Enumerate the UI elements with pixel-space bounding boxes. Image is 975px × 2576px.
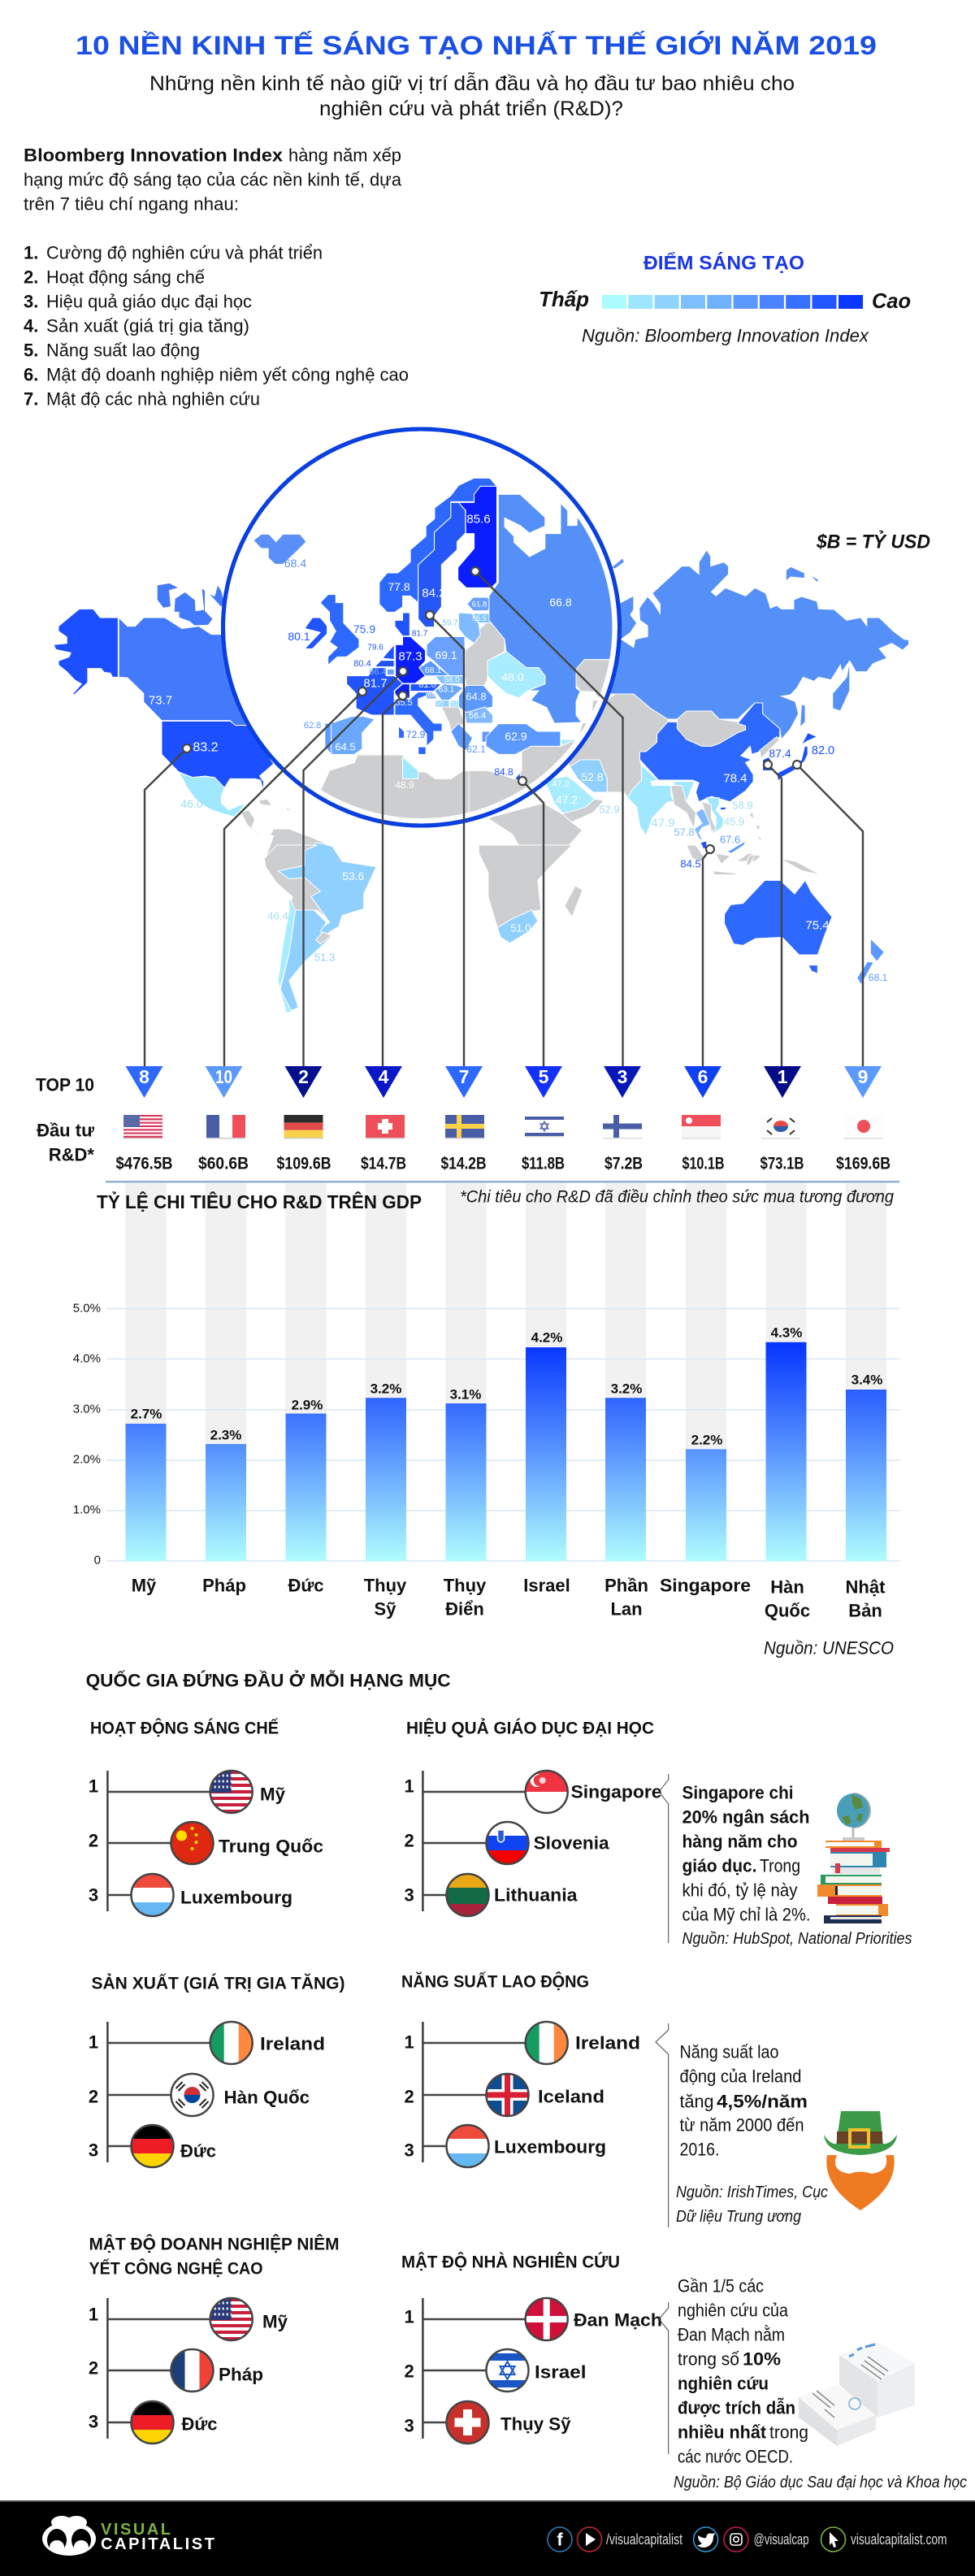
R&D investment values: $14.7B [361, 1154, 406, 1173]
criteria list: 5. [24, 340, 38, 361]
callout: Ireland: từ năm 2000 đến [679, 2114, 804, 2136]
panel: manufacturing: Ireland [260, 2033, 325, 2054]
map value labels: 67.6 [720, 834, 740, 845]
map value labels: 47.2 [556, 793, 578, 806]
R&D investment values: $7.2B [604, 1154, 643, 1173]
chart title: TỶ LỆ CHI TIÊU CHO R&D TRÊN GDP [97, 1190, 422, 1212]
panel: manufacturing [89, 1975, 344, 2168]
panel: manufacturing: 3 [89, 2140, 98, 2160]
map value labels: 55.5 [472, 614, 487, 622]
panel: patent activity [89, 1718, 323, 1917]
callout: Ireland: động của Ireland [679, 2066, 801, 2087]
panel: manufacturing: 1 [89, 2032, 98, 2053]
panel: labor productivity: Luxembourg [494, 2137, 606, 2157]
intro text block: Bloomberg Innovation Index [24, 145, 284, 166]
y axis labels: 4.0% [73, 1352, 101, 1365]
y axis labels: 1.0% [73, 1503, 101, 1516]
bar value labels: 4.3% [771, 1325, 802, 1341]
rank triangles: 6 [698, 1066, 708, 1087]
bar value labels: 2.2% [691, 1432, 722, 1448]
country labels: Thụy [444, 1575, 487, 1596]
map value labels: 77.8 [388, 580, 410, 593]
callout: Singapore: hàng năm cho [682, 1832, 798, 1851]
country labels: Bản [848, 1601, 882, 1620]
legend: innovation score: ĐIỂM SÁNG TẠO [644, 252, 804, 275]
map: Europe inset [254, 478, 622, 835]
panel: patent activity: Luxembourg [180, 1887, 292, 1908]
subtitle: nghiên cứu và phát triển (R&D)? [319, 98, 623, 120]
panel: labor productivity: Iceland [538, 2087, 604, 2106]
rank triangles: 7 [459, 1066, 469, 1087]
callout: Ireland: tăng [679, 2092, 713, 2111]
map value labels: 73.7 [149, 694, 172, 707]
R&D investment values: $476.5B [115, 1154, 172, 1173]
map value labels: 62.8 [304, 721, 321, 731]
panel: labor productivity: 2 [404, 2087, 414, 2106]
map value labels: 62.9 [505, 730, 527, 743]
callout: Singapore: của Mỹ chỉ là 2%. [682, 1905, 811, 1924]
chart source: Nguồn: UNESCO [764, 1638, 894, 1658]
country labels: Điển [445, 1599, 484, 1619]
subtitle: Những nền kinh tế nào giữ vị trí dẫn đầu và họ đầu tư bao nhiêu cho [150, 72, 795, 95]
criteria list: Sản xuất (giá trị gia tăng) [46, 315, 249, 336]
map value labels: 69.1 [435, 648, 457, 661]
icon: documents [799, 2342, 915, 2446]
country labels: Sỹ [375, 1599, 396, 1619]
panel: researcher density [401, 2253, 662, 2444]
logo: CAPITALIST [101, 2535, 214, 2553]
heading: MẬT ĐỘ DOANH NGHIỆP NIÊM [89, 2235, 340, 2254]
R&D investment values: $73.1B [760, 1154, 804, 1173]
map value labels: 47.2 [552, 779, 570, 789]
footer [0, 2500, 975, 2576]
panel: manufacturing: 2 [89, 2087, 98, 2106]
bar value labels: 2.9% [292, 1398, 323, 1412]
panel: labor productivity: 3 [404, 2140, 414, 2160]
country labels: Singapore [660, 1575, 751, 1596]
map value labels: 82.0 [812, 744, 834, 757]
intro text block [24, 145, 402, 215]
map value labels: 80.4 [353, 659, 371, 669]
country labels: Pháp [202, 1575, 246, 1596]
map value labels: 64 [428, 692, 436, 699]
row label: top 10: TOP 10 [36, 1074, 94, 1095]
map value labels: 59.7 [442, 619, 458, 627]
panel: researcher density: 3 [404, 2415, 414, 2436]
criteria list: Mật độ doanh nghiệp niêm yết công nghệ cao [46, 364, 409, 385]
map value labels: 57.8 [674, 826, 695, 839]
bar value labels: 3.4% [852, 1372, 882, 1388]
callout: Denmark: được trích dẫn [678, 2397, 795, 2418]
bars [125, 1342, 886, 1561]
map: South America, Africa, Oceania [264, 843, 884, 1013]
panel: higher education: 2 [404, 1830, 414, 1851]
bar value labels: 3.2% [370, 1381, 401, 1396]
callout: Singapore: Trong [760, 1856, 800, 1876]
country labels: Lan [610, 1599, 643, 1619]
R&D investment values: $10.1B [682, 1154, 725, 1173]
panel: high-tech density: 3 [89, 2412, 98, 2431]
heading [89, 2235, 340, 2279]
map value labels: 79.6 [367, 644, 384, 652]
map value labels: 81.0 [418, 680, 436, 690]
callout: Denmark: Gần 1/5 các [678, 2275, 764, 2296]
map value labels: 45.9 [724, 816, 744, 827]
map: western Russia, Black Sea, Middle East inset [469, 494, 622, 818]
panel: labor productivity: 1 [404, 2032, 414, 2053]
panel: higher education: Lithuania [494, 1885, 578, 1905]
map value labels: 78.4 [723, 772, 748, 785]
country labels: Phần [604, 1575, 648, 1596]
legend: innovation score [539, 252, 911, 346]
social links [548, 2527, 947, 2552]
criteria list: Năng suất lao động [46, 340, 200, 361]
chart footnote: *Chi tiêu cho R&D đã điều chỉnh theo sức mua tương đương [460, 1188, 894, 1206]
country labels: Israel [523, 1575, 570, 1596]
callout: Ireland [656, 2023, 828, 2227]
rank triangles: 4 [379, 1066, 389, 1087]
callout: Denmark: 10% [743, 2348, 781, 2370]
bar value labels: 4.2% [531, 1329, 562, 1346]
map value labels: 72.9 [406, 729, 426, 740]
map value labels: 51.3 [314, 951, 335, 964]
panel: labor productivity: Ireland [575, 2033, 640, 2053]
criteria list: 2. [24, 267, 38, 288]
callout: Singapore: giáo dục. [682, 1856, 757, 1876]
callout: Denmark: nghiên cứu của [678, 2300, 789, 2321]
criteria list: 1. [24, 242, 38, 263]
R&D investment values: $14.2B [440, 1154, 486, 1173]
map value labels: 68.1 [425, 666, 441, 675]
heading: HIỆU QUẢ GIÁO DỤC ĐẠI HỌC [406, 1718, 654, 1737]
map value labels: 46.4 [267, 910, 288, 922]
legend: innovation score: Thấp [539, 287, 589, 311]
country labels: Nhật [846, 1576, 886, 1598]
bar value labels: 2.3% [210, 1427, 241, 1443]
currency note: $B = TỶ USD [816, 530, 930, 553]
icon: leprechaun [824, 2111, 897, 2210]
map value labels: 48.9 [395, 779, 414, 791]
panel: researcher density: Thụy Sỹ [500, 2413, 571, 2435]
criteria list: Mật độ các nhà nghiên cứu [46, 388, 260, 410]
y axis labels [73, 1302, 101, 1567]
panel: higher education: Slovenia [534, 1833, 609, 1853]
y axis labels: 5.0% [73, 1302, 101, 1315]
callout: Ireland: 4,5%/năm [717, 2092, 808, 2111]
social links: f [557, 2529, 563, 2550]
rank triangles: 9 [858, 1066, 868, 1087]
social links: visualcapitalist.com [851, 2531, 947, 2548]
map value labels: 64.8 [466, 691, 487, 702]
social links: @visualcap [754, 2531, 809, 2548]
map value labels: 58.9 [732, 800, 753, 811]
country labels [132, 1575, 886, 1620]
callout: Denmark: nhiều nhất [678, 2422, 767, 2443]
title: 10 NỀN KINH TẾ SÁNG TẠO NHẤT THẾ GIỚI NĂM 2019 [76, 31, 877, 60]
rank triangles: 5 [539, 1066, 549, 1087]
map value labels: 51.0 [510, 922, 531, 935]
panel: patent activity: 1 [89, 1776, 98, 1796]
country labels: Hàn [770, 1576, 804, 1598]
map value labels: 68.4 [284, 557, 306, 570]
map value labels: 68.1 [869, 972, 888, 983]
map value labels: 87.3 [398, 650, 422, 663]
panel: labor productivity [401, 1971, 640, 2168]
panel: higher education [404, 1718, 661, 1917]
legend: innovation score: Nguồn: Bloomberg Innovation Index [582, 325, 869, 346]
callout: Singapore: Singapore chi [682, 1783, 793, 1802]
callout: Denmark: các nước OECD. [678, 2446, 793, 2467]
callout: Ireland: Năng suất lao [679, 2041, 778, 2062]
row label: R&D investment [37, 1120, 94, 1165]
R&D investment values: $169.6B [836, 1154, 890, 1173]
callout: Ireland: Nguồn: IrishTimes, Cục [676, 2184, 828, 2201]
callout: Denmark: trong [769, 2422, 808, 2443]
R&D investment values [115, 1154, 890, 1173]
country labels: Thụy [364, 1575, 407, 1596]
map value labels: 66.4 [369, 667, 387, 677]
rectangular flags [124, 1115, 883, 1139]
map value labels: 52.8 [581, 770, 604, 783]
map: Asia outside the circle [488, 550, 908, 861]
panel: researcher density: 2 [404, 2361, 414, 2381]
map: Americas north [54, 583, 330, 861]
country labels: Đức [288, 1575, 324, 1596]
R&D investment values: $11.8B [522, 1154, 565, 1173]
map value labels: 51 [451, 699, 458, 707]
criteria list: 3. [24, 291, 38, 312]
panel: higher education: Singapore [570, 1781, 661, 1802]
panel: high-tech density: 1 [89, 2305, 98, 2324]
map value labels: 80.1 [288, 630, 310, 643]
criteria list [24, 242, 409, 410]
criteria list: 7. [24, 388, 38, 410]
heading: SẢN XUẤT (GIÁ TRỊ GIA TĂNG) [91, 1975, 344, 1993]
bar value labels [131, 1325, 882, 1448]
heading: NĂNG SUẤT LAO ĐỘNG [401, 1971, 589, 1991]
icon: books and globe [817, 1793, 890, 1923]
callout: Singapore: 20% ngân sách [682, 1807, 809, 1827]
callout: Singapore: Nguồn: HubSpot, National Priorities [682, 1930, 912, 1948]
R&D investment values: $109.6B [276, 1154, 332, 1173]
country labels: Quốc [765, 1601, 810, 1620]
panel: higher education: 1 [404, 1776, 414, 1796]
map value labels: 64.5 [335, 741, 356, 752]
intro text block: trên 7 tiêu chí ngang nhau: [24, 193, 239, 215]
map value labels: 55 [436, 699, 444, 707]
y axis labels: 0 [94, 1554, 101, 1567]
y axis labels: 3.0% [73, 1403, 101, 1416]
map value labels: 75.4 [805, 918, 830, 933]
rank triangles: 3 [618, 1066, 627, 1087]
rank triangles: 2 [298, 1066, 309, 1087]
panel: patent activity: 2 [89, 1830, 98, 1851]
map value labels: 53.6 [342, 870, 365, 883]
heading: MẬT ĐỘ NHÀ NGHIÊN CỨU [401, 2253, 620, 2272]
intro text block: hàng năm xếp [288, 145, 401, 166]
map value labels: 61.8 [472, 600, 487, 609]
intro text block: hạng mức độ sáng tạo của các nền kinh tế, dựa [24, 169, 402, 190]
panel: high-tech density: Pháp [219, 2365, 263, 2384]
subtitle [150, 72, 795, 120]
criteria list: 4. [24, 315, 38, 336]
panel: manufacturing: Hàn Quốc [224, 2087, 310, 2108]
map value labels: 81.7 [412, 629, 428, 639]
panel: high-tech density: Đức [182, 2413, 218, 2435]
panel: higher education: 3 [404, 1885, 414, 1905]
row label: R&D investment: R&D* [49, 1144, 94, 1165]
panel: high-tech density [89, 2235, 340, 2444]
callout: Ireland: 2016. [679, 2139, 720, 2160]
callout: Denmark: Đan Mạch nằm [678, 2324, 785, 2345]
callout: Ireland: Dữ liệu Trung ương [676, 2208, 801, 2226]
legend: innovation score: Cao [872, 288, 911, 313]
bar value labels: 2.7% [131, 1406, 162, 1422]
map value labels: 62.1 [466, 744, 486, 755]
map value labels: 46.0 [180, 797, 203, 810]
map value labels: 81.7 [363, 676, 388, 691]
callout: Denmark: trong số [678, 2348, 739, 2370]
y axis labels: 2.0% [73, 1453, 101, 1466]
map value labels: 66.8 [549, 596, 572, 609]
panel: patent activity: Mỹ [260, 1785, 286, 1804]
callout: Denmark [659, 2275, 967, 2491]
heading: HOẠT ĐỘNG SÁNG CHẾ [90, 1718, 279, 1737]
map value labels: 84.2 [422, 587, 446, 600]
map value labels: 84.5 [680, 858, 701, 870]
heading: YẾT CÔNG NGHỆ CAO [89, 2259, 263, 2279]
callout: Denmark: nghiên cứu [678, 2373, 769, 2394]
map value labels [149, 512, 888, 983]
map value labels: 58.0 [444, 676, 460, 684]
R&D investment values: $60.6B [198, 1154, 249, 1173]
rank triangles: 8 [139, 1066, 150, 1087]
country labels: Mỹ [132, 1575, 157, 1596]
leader lines [145, 567, 863, 1066]
callout: Singapore: khi đó, tỷ lệ này [682, 1880, 798, 1900]
map value labels: 87.4 [769, 747, 791, 760]
logo: VISUAL [101, 2521, 171, 2539]
map value labels: 56.4 [469, 711, 486, 721]
circle inset background [223, 429, 619, 826]
map value labels: 48.0 [501, 670, 524, 683]
panel: manufacturing: Đức [180, 2140, 216, 2162]
circle outline [223, 429, 619, 826]
panel: patent activity: 3 [89, 1885, 98, 1905]
row label: R&D investment: Đầu tư [37, 1120, 94, 1141]
rank triangles: 10 [215, 1066, 232, 1087]
bar value labels: 3.2% [611, 1381, 642, 1396]
map value labels: 47.9 [651, 816, 675, 830]
map value labels: 63.1 [439, 686, 455, 694]
map value labels: 85.5 [395, 698, 413, 708]
map value labels: 85.6 [466, 512, 491, 527]
map value labels: 83.2 [193, 741, 219, 754]
logo [42, 2516, 214, 2556]
panel: researcher density: Israel [535, 2361, 587, 2383]
criteria list: Cường độ nghiên cứu và phát triển [46, 242, 323, 263]
map value labels: 84.8 [494, 766, 514, 778]
panel: high-tech density: Mỹ [262, 2311, 288, 2332]
panel: researcher density: 1 [404, 2306, 414, 2327]
bar value labels: 3.1% [450, 1386, 481, 1403]
criteria list: Hiệu quả giáo dục đại học [46, 291, 252, 312]
bar chart [73, 1183, 899, 1620]
map value labels: 52.9 [599, 803, 620, 816]
criteria list: Hoạt động sáng chế [46, 267, 205, 288]
panel: patent activity: Trung Quốc [219, 1837, 323, 1856]
section heading: QUỐC GIA ĐỨNG ĐẦU Ở MỖI HẠNG MỤC [86, 1669, 451, 1690]
social links: /visualcapitalist [606, 2531, 682, 2548]
rank triangles: 1 [778, 1066, 788, 1087]
rank triangles [125, 1066, 882, 1098]
panel: researcher density: Đan Mạch [574, 2309, 662, 2331]
callout: Singapore [659, 1774, 912, 1948]
map value labels: 75.9 [353, 622, 375, 635]
criteria list: 6. [24, 364, 38, 385]
panel: high-tech density: 2 [89, 2358, 98, 2378]
